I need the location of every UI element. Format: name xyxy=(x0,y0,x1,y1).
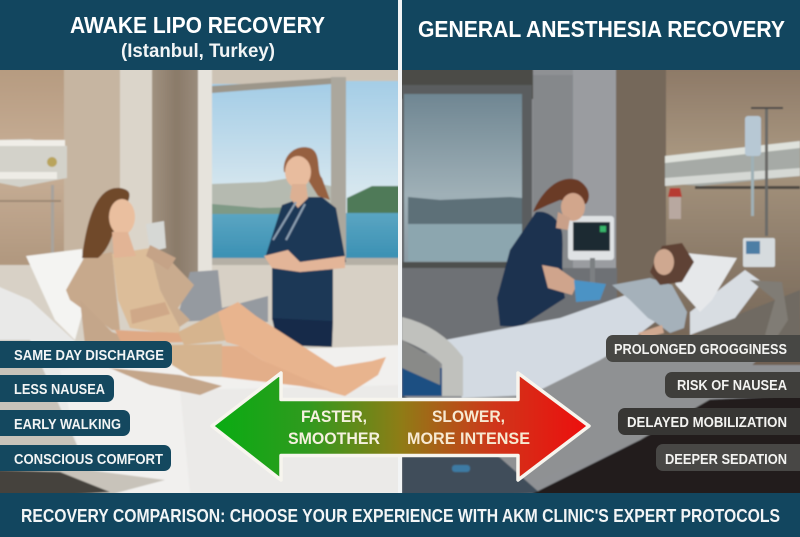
woman cardigan xyxy=(66,252,120,330)
pill: early walking: EARLY WALKING xyxy=(14,417,121,433)
subheading: location: (Istanbul, Turkey) xyxy=(121,41,275,62)
pill: risk of nausea: RISK OF NAUSEA xyxy=(677,378,787,394)
floor xyxy=(402,395,540,500)
woman head xyxy=(82,188,130,258)
pill: delayed mobilization: DELAYED MOBILIZATION xyxy=(627,415,787,431)
heading panel: general anesthesia xyxy=(402,0,800,70)
monitor xyxy=(568,216,614,260)
pill: same day discharge xyxy=(0,341,172,368)
pill: deeper sedation: DEEPER SEDATION xyxy=(665,452,787,468)
heading: awake lipo recovery: AWAKE LIPO RECOVERY xyxy=(70,12,325,38)
bed rail xyxy=(402,317,463,396)
pill: early walking xyxy=(0,410,130,436)
nurse xyxy=(497,212,565,327)
mattress xyxy=(92,344,398,493)
nurse xyxy=(265,197,346,322)
benefits list: awake lipo xyxy=(0,341,172,471)
headboard panel xyxy=(0,139,67,187)
woman torso xyxy=(112,248,180,335)
double arrow: faster vs slower xyxy=(212,373,589,480)
bed body xyxy=(616,362,756,440)
pill: same day discharge: SAME DAY DISCHARGE xyxy=(14,348,164,364)
divider xyxy=(398,0,402,493)
label: slower, more intense: SLOWER, xyxy=(432,408,505,426)
pill: prolonged grogginess xyxy=(606,335,800,362)
panel: general anesthesia room scene xyxy=(398,65,800,500)
iv pole xyxy=(765,108,768,236)
woman legs xyxy=(178,312,230,345)
footer banner xyxy=(0,493,800,537)
patient xyxy=(612,278,687,333)
armchair xyxy=(176,270,268,322)
pill: less nausea xyxy=(0,375,114,402)
pill: risk of nausea xyxy=(665,372,800,398)
label: faster, smoother: SMOOTHER xyxy=(288,430,380,448)
heading panel: awake lipo xyxy=(0,0,398,70)
label: slower, more intense: MORE INTENSE xyxy=(407,430,530,448)
pill: less nausea: LESS NAUSEA xyxy=(14,382,105,398)
infusion pump xyxy=(743,238,775,267)
label: faster, smoother: FASTER, xyxy=(301,408,367,426)
sheets xyxy=(445,290,655,398)
label: faster, smoother xyxy=(288,408,380,448)
window xyxy=(402,85,532,270)
pill: conscious comfort: CONSCIOUS COMFORT xyxy=(14,452,163,468)
bed backrest xyxy=(0,286,80,445)
pill: deeper sedation xyxy=(656,444,800,471)
headboard panel xyxy=(664,148,800,187)
drawbacks list: general anesthesia xyxy=(606,335,800,471)
panel: awake lipo room scene xyxy=(0,65,405,500)
label: slower, more intense xyxy=(407,408,530,448)
pill: delayed mobilization xyxy=(618,408,800,435)
pill: conscious comfort xyxy=(0,445,171,471)
